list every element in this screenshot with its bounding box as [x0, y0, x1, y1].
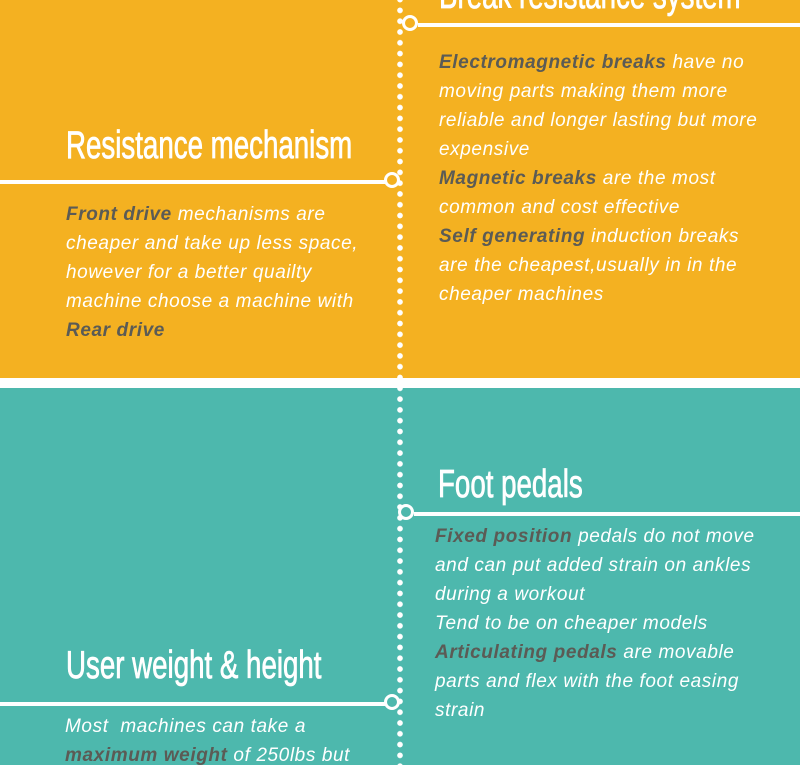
- text: foot pedals body: [434, 526, 755, 721]
- panel: top orange: [0, 0, 800, 378]
- text: user weight body: [65, 716, 350, 766]
- text: resistance mechanism body: [66, 204, 358, 341]
- connector: break resistance: [402, 15, 800, 31]
- text: foot pedals body: Articulating pedals are movable: [435, 642, 734, 663]
- text: foot pedals body: parts and flex with the foot easing: [435, 671, 739, 692]
- text: break resistance body: [439, 52, 757, 305]
- text: break resistance body: common and cost effective: [439, 197, 680, 218]
- text: foot pedals body: during a workout: [435, 584, 585, 605]
- connector: resistance mechanism: [0, 172, 400, 188]
- text: break resistance body: Electromagnetic breaks have no: [439, 52, 744, 73]
- text: break resistance body: expensive: [439, 139, 530, 160]
- text: break resistance body: Self generating induction breaks: [439, 226, 739, 247]
- text: break resistance body: Magnetic breaks are the most: [439, 168, 716, 189]
- text: user weight body: Most machines can take a: [65, 716, 306, 737]
- heading: User weight & height: User weight & height: [66, 644, 322, 687]
- text: foot pedals body: Fixed position pedals do not move: [435, 526, 755, 547]
- heading: Foot pedals: Foot pedals: [438, 463, 583, 506]
- text: break resistance body: cheaper machines: [439, 284, 604, 305]
- connector: foot pedals: [398, 504, 800, 520]
- text: break resistance body: are the cheapest,usually in in the: [439, 255, 737, 276]
- text: foot pedals body: and can put added strain on ankles: [435, 555, 751, 576]
- text: user weight body: maximum weight of 250lbs but: [65, 745, 350, 766]
- panel: bottom teal: [0, 388, 800, 765]
- text: foot pedals body: Tend to be on cheaper models: [435, 613, 708, 634]
- text: resistance mechanism body: machine choose a machine with: [66, 291, 354, 312]
- heading: Resistance mechanism: Resistance mechanism: [66, 124, 352, 167]
- dotted timeline: [396, 0, 404, 765]
- text: break resistance body: moving parts making them more: [439, 81, 728, 102]
- connector: user weight: [0, 694, 400, 710]
- text: resistance mechanism body: Rear drive: [66, 320, 165, 341]
- text: foot pedals body: strain: [435, 700, 485, 721]
- text: resistance mechanism body: however for a better quailty: [66, 262, 312, 283]
- text: resistance mechanism body: Front drive mechanisms are: [66, 204, 326, 225]
- text: resistance mechanism body: cheaper and take up less space,: [66, 233, 358, 254]
- text: break resistance body: reliable and longer lasting but more: [439, 110, 757, 131]
